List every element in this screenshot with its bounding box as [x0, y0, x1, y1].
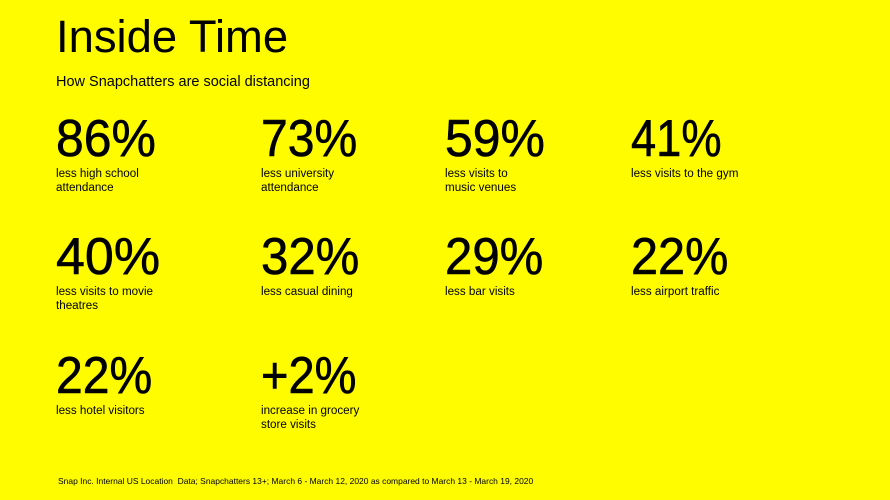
- stat: university attendance: attendance: [261, 181, 319, 194]
- stat: grocery store visits: [261, 347, 360, 431]
- footnote: Snap Inc. Internal US Location Data; Snapchatters 13+; March 6 - March 12, 2020 as compared to March 13 - March 19, 2020: [58, 476, 533, 486]
- stat: university attendance: [261, 110, 357, 194]
- stat: music venues: [445, 110, 545, 194]
- stat: high school attendance: attendance: [56, 181, 114, 194]
- title: Inside Time: [56, 11, 288, 62]
- stat: grocery store visits: +2%: [261, 347, 357, 405]
- stat: university attendance: less university: [261, 167, 334, 180]
- subtitle: How Snapchatters are social distancing: [56, 74, 310, 90]
- stat: high school attendance: [56, 110, 156, 194]
- stat: gym: [631, 110, 738, 180]
- stat: movie theatres: theatres: [56, 299, 98, 312]
- stat: grocery store visits: store visits: [261, 418, 316, 431]
- stat: bar visits: less bar visits: [445, 285, 515, 298]
- stat: airport traffic: less airport traffic: [631, 285, 719, 298]
- stat: gym: 41%: [631, 110, 722, 168]
- stat: music venues: 59%: [445, 110, 545, 168]
- stat: music venues: less visits to: [445, 167, 508, 180]
- stat: university attendance: 73%: [261, 110, 357, 168]
- stat: movie theatres: less visits to movie: [56, 285, 153, 298]
- stat: airport traffic: 22%: [631, 228, 728, 286]
- stat: casual dining: 32%: [261, 228, 359, 286]
- stat: high school attendance: 86%: [56, 110, 156, 168]
- stat: music venues: music venues: [445, 181, 516, 194]
- stat: bar visits: 29%: [445, 228, 543, 286]
- stat: movie theatres: 40%: [56, 228, 160, 286]
- stat: high school attendance: less high school: [56, 167, 139, 180]
- stat: movie theatres: [56, 228, 160, 312]
- stat: gym: less visits to the gym: [631, 167, 738, 180]
- stat: casual dining: less casual dining: [261, 285, 353, 298]
- stat: hotel visitors: less hotel visitors: [56, 404, 145, 417]
- stat: grocery store visits: increase in grocery: [261, 404, 359, 417]
- stat: hotel visitors: 22%: [56, 347, 152, 405]
